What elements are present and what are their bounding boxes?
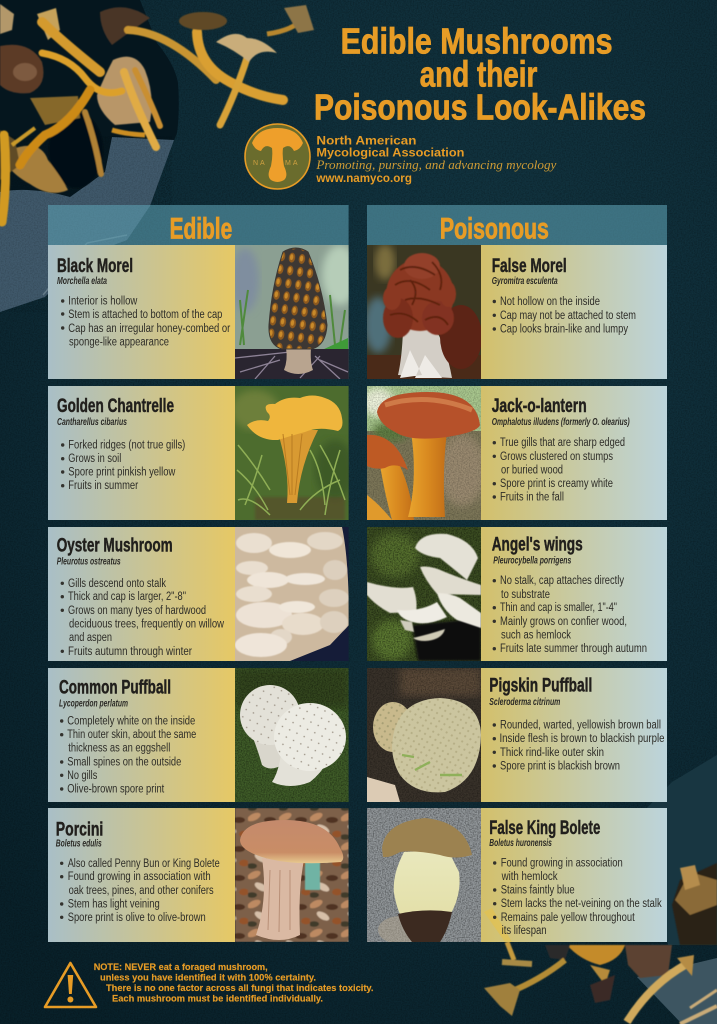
bullet list: Spore print is blackish brown — [500, 760, 620, 772]
bullet list — [60, 716, 196, 796]
bullet list: to substrate — [501, 589, 550, 601]
bullet list — [61, 440, 185, 492]
title: False King Bolete: False King Bolete — [489, 818, 600, 839]
scientific name: Morchella elata — [57, 276, 107, 287]
icon: warning triangle — [45, 963, 96, 1007]
bullet list — [61, 295, 230, 348]
bullet list: No stalk, cap attaches directly — [500, 575, 624, 587]
scientific name: Scleroderma citrinum — [489, 697, 560, 708]
scientific name: Pleurocybella porrigens — [493, 555, 572, 566]
organization text: North American — [316, 133, 416, 147]
title: and their — [420, 54, 537, 95]
bullet list: Cap may not be attached to stem — [500, 310, 636, 322]
organization text: www.namyco.org — [315, 171, 412, 185]
title: Porcini: Porcini — [56, 820, 103, 841]
organization text: Mycological Association — [316, 146, 464, 160]
slate rock top left — [0, 0, 179, 312]
bullet list: deciduous trees, frequently on willow — [69, 618, 225, 630]
bullet list: Thin outer skin, about the same — [67, 729, 196, 741]
bullet list: Interior is hollow — [68, 295, 138, 307]
bullet list: Not hollow on the inside — [500, 296, 600, 308]
bullet list — [60, 858, 220, 924]
scientific name: Omphalotus illudens (formerly O. olearius) — [492, 417, 630, 428]
bullet list: Thick and cap is larger, 2"-8" — [68, 591, 186, 603]
scientific name: Gyromitra esculenta — [492, 276, 558, 287]
panel: Porcini — [48, 808, 349, 942]
bullet list: Fruits late summer through autumn — [500, 643, 647, 655]
bullet list — [61, 578, 225, 658]
bullet list: Spore print is olive to olive-brown — [68, 912, 206, 924]
bullet list: Spore print is creamy white — [500, 478, 613, 490]
photo: false king bolete — [367, 808, 481, 944]
bullet list: thickness as an eggshell — [68, 742, 170, 754]
panel: False King Bolete — [367, 808, 667, 944]
photo: angel's wings — [367, 527, 481, 661]
bullet list: Found growing in association with — [68, 871, 211, 883]
bullet list: Completely white on the inside — [67, 716, 195, 728]
bullet list: Cap has an irregular honey-combed or — [68, 323, 230, 335]
bullet list: Small spines on the outside — [67, 756, 181, 768]
warning note — [94, 962, 373, 1004]
title: Poisonous Look-Alikes — [314, 86, 646, 127]
bullet list: Grows clustered on stumps — [500, 451, 613, 463]
panel: Golden Chantrelle — [48, 386, 355, 520]
bullet list: its lifespan — [502, 925, 547, 937]
bullet list: Inside flesh is brown to blackish purple — [500, 733, 664, 745]
chanterelles top left — [0, 4, 314, 222]
bullet list: Stem is attached to bottom of the cap — [68, 309, 222, 321]
bullet list: Mainly grows on confier wood, — [500, 616, 627, 628]
title: Black Morel: Black Morel — [57, 256, 133, 277]
warning note: There is no one factor across all fungi that indicates toxicity. — [106, 983, 374, 994]
header: Poisonous: Poisonous — [440, 212, 549, 245]
header: Poisonous — [367, 205, 667, 245]
scientific name: Cantharellus cibarius — [57, 417, 127, 428]
bullet list: No gills — [67, 770, 97, 782]
title: False Morel: False Morel — [492, 256, 567, 277]
bullet list: such as hemlock — [501, 630, 571, 642]
photo: oyster mushroom — [235, 527, 349, 661]
photo: black morel — [235, 245, 349, 379]
panel: Oyster Mushroom — [48, 527, 349, 661]
bullet list — [493, 720, 664, 772]
title — [314, 20, 646, 127]
title: Angel's wings: Angel's wings — [492, 535, 583, 556]
panel: False Morel — [364, 244, 667, 379]
warning note: unless you have identified it with 100% certainty. — [100, 972, 316, 984]
title: Oyster Mushroom: Oyster Mushroom — [57, 536, 173, 557]
panel: Common Puffball — [48, 668, 349, 802]
bullet list: Gills descend onto stalk — [68, 578, 166, 590]
organization text — [315, 133, 557, 185]
scientific name: Pleurotus ostreatus — [57, 556, 121, 567]
bullet list: Also called Penny Bun or King Bolete — [68, 858, 220, 870]
bullet list: Grows on many tyes of hardwood — [68, 605, 206, 617]
panel: Angel's wings — [367, 527, 667, 661]
bullet list: Stains faintly blue — [501, 884, 575, 896]
bullet list: Remains pale yellow throughout — [501, 912, 635, 924]
title: Pigskin Puffball: Pigskin Puffball — [489, 676, 592, 697]
bullet list: Spore print pinkish yellow — [68, 466, 176, 478]
header: Edible: Edible — [170, 212, 232, 245]
bullet list: Grows in soil — [68, 453, 121, 465]
photo: common puffball — [235, 668, 349, 802]
bullet list — [493, 858, 662, 937]
bullet list: Stem has light veining — [68, 898, 160, 910]
organization text: Promoting, pursing, and advancing mycology — [315, 158, 557, 172]
bullet list: Stem lacks the net-veining on the stalk — [501, 898, 662, 910]
title: Jack-o-lantern: Jack-o-lantern — [492, 396, 587, 417]
header: Edible — [48, 205, 349, 245]
bullet list: Thick rind-like outer skin — [500, 747, 604, 759]
warning note: NOTE: NEVER eat a foraged mushroom, — [94, 962, 268, 973]
logo: NAMA mushroom: NA — [253, 160, 267, 167]
bullet list: Cap looks brain-like and lumpy — [500, 324, 628, 336]
bullet list: sponge-like appearance — [69, 336, 169, 348]
bullet list — [493, 437, 625, 504]
scientific name: Boletus huronensis — [489, 838, 552, 849]
title: Common Puffball: Common Puffball — [59, 677, 171, 698]
bullet list: Fruits in the fall — [500, 492, 564, 504]
bullet list: or buried wood — [501, 464, 563, 476]
chanterelles bottom right — [484, 863, 717, 1024]
scientific name: Lycoperdon perlatum — [59, 699, 128, 710]
bullet list: Fruits in summer — [68, 480, 138, 492]
photo: false morel — [364, 244, 482, 379]
bullet list: with hemlock — [501, 871, 558, 883]
slate rock bottom right — [637, 755, 717, 1024]
title: Golden Chantrelle: Golden Chantrelle — [57, 396, 174, 417]
bullet list: Rounded, warted, yellowish brown ball — [500, 720, 661, 732]
bullet list — [493, 296, 636, 336]
warning note: Each mushroom must be identified individually. — [112, 994, 323, 1004]
bullet list: True gills that are sharp edged — [500, 437, 625, 449]
scientific name: Boletus edulis — [56, 839, 102, 850]
panel: Black Morel — [48, 245, 358, 379]
bullet list: Thin and cap is smaller, 1"-4" — [500, 602, 617, 614]
panel: Jack-o-lantern — [362, 386, 667, 520]
bullet list: and aspen — [69, 632, 112, 644]
bullet list: Olive-brown spore print — [67, 784, 165, 796]
logo: NAMA mushroom — [245, 124, 310, 189]
photo: golden chanterelle — [231, 386, 355, 520]
bullet list: Forked ridges (not true gills) — [68, 440, 185, 452]
bullet list: Found growing in association — [501, 858, 623, 870]
photo: pigskin puffball — [367, 668, 481, 802]
title: Edible Mushrooms — [341, 20, 613, 61]
logo: NAMA mushroom: MA — [285, 160, 300, 167]
bullet list — [493, 575, 647, 655]
bullet list: oak trees, pines, and other conifers — [69, 885, 214, 897]
panel: Pigskin Puffball — [367, 668, 667, 802]
bullet list: Fruits autumn through winter — [68, 646, 192, 658]
photo: porcini — [235, 808, 349, 942]
photo: jack-o-lantern — [362, 386, 486, 520]
